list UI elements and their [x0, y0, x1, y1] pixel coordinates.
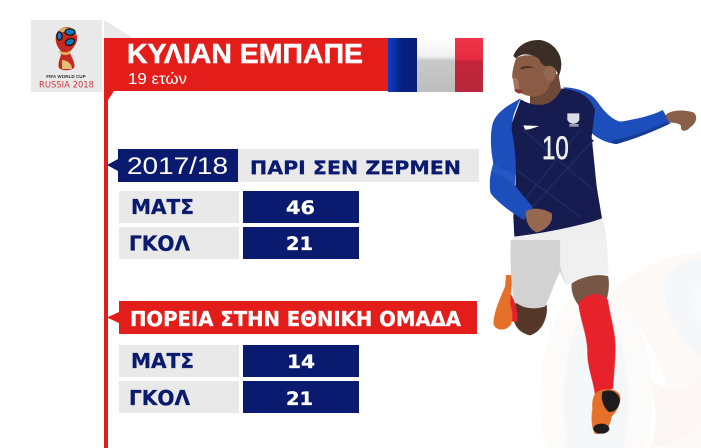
- row: matches: ΜΑΤΣ: [131, 349, 194, 373]
- knee: [571, 275, 609, 305]
- logo: FIFA World Cup Russia 2018: [31, 20, 102, 92]
- row: matches: 14: [287, 351, 315, 373]
- icon: trophy: [56, 27, 77, 70]
- player name: ΚΥΛΙΑΝ ΕΜΠΑΠΕ: [127, 38, 363, 69]
- logo wordmark: RUSSIA 2018: [39, 80, 94, 90]
- front boot: [592, 389, 620, 434]
- icon: French flag: [388, 38, 483, 92]
- left hand: [526, 209, 552, 232]
- crest and tick: [523, 113, 579, 130]
- torso: [509, 88, 602, 237]
- head: [512, 55, 556, 96]
- season label: [107, 149, 238, 182]
- shorts: [511, 240, 608, 308]
- rear boot: [494, 275, 513, 330]
- row: goals: 21: [286, 388, 313, 410]
- shirt number: 10: [542, 130, 569, 166]
- club stats table: [119, 191, 359, 259]
- row: matches: [119, 191, 359, 223]
- logo caption: FIFA WORLD CUP: [46, 74, 86, 79]
- season label: 2017/18: [127, 153, 228, 180]
- right hand: [666, 111, 696, 131]
- club name: ΠΑΡΙ ΣΕΝ ΖΕΡΜΕΝ: [250, 157, 461, 179]
- timeline line: [104, 38, 108, 448]
- rear leg: [513, 303, 547, 335]
- row: goals: ΓΚΟΛ: [129, 386, 190, 410]
- national team header: ΠΟΡΕΙΑ ΣΤΗΝ ΕΘΝΙΚΗ ΟΜΑΔΑ: [130, 307, 462, 331]
- title banner: [104, 38, 388, 110]
- row: goals: 21: [286, 233, 313, 255]
- rear sock: [508, 290, 517, 322]
- national team stats table: [119, 345, 359, 413]
- neck: [530, 73, 562, 108]
- row: goals: [119, 381, 359, 413]
- background: faded tournament emblem: [540, 252, 701, 448]
- front sock: [578, 294, 616, 395]
- lower body: [494, 240, 620, 434]
- shorts top: [511, 219, 606, 250]
- age: 19 ετών: [128, 71, 187, 88]
- row: matches: ΜΑΤΣ: [131, 195, 194, 219]
- left sleeve: [490, 98, 533, 220]
- season header: [107, 149, 479, 182]
- club name: [238, 149, 479, 182]
- player illustration: [490, 40, 696, 434]
- row: matches: 46: [286, 197, 315, 219]
- row: goals: [119, 227, 359, 259]
- row: matches: [119, 345, 359, 377]
- decorative fold triangle: [104, 20, 133, 38]
- row: goals: ΓΚΟΛ: [129, 232, 190, 256]
- right sleeve: [563, 87, 671, 144]
- national team header: [107, 301, 477, 334]
- hair: [513, 40, 561, 76]
